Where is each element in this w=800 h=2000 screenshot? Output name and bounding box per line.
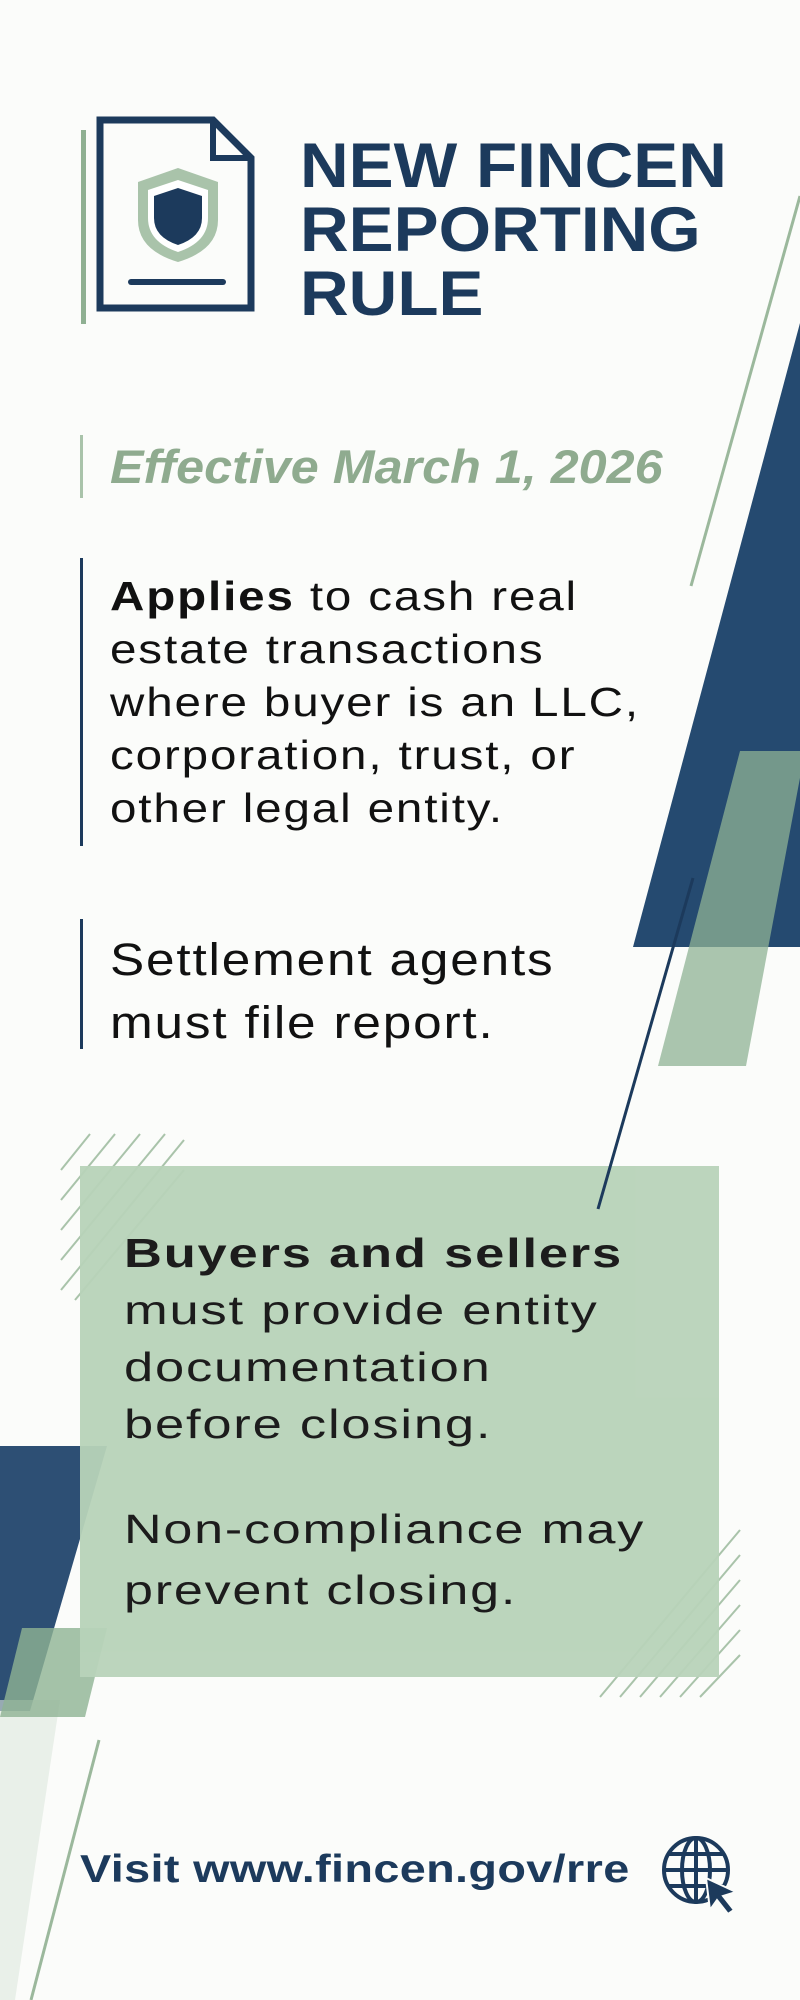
title xyxy=(300,131,727,329)
panel: requirements box xyxy=(80,1166,719,1677)
text block: applies: other legal entity. xyxy=(110,785,504,831)
text block: applies xyxy=(80,558,640,846)
text: buyers and sellers: documentation xyxy=(124,1344,492,1390)
text: buyers and sellers xyxy=(124,1230,623,1447)
effective date: Effective March 1, 2026 xyxy=(110,440,663,493)
text: buyers and sellers: Buyers and sellers xyxy=(124,1230,623,1276)
title: RULE xyxy=(300,259,484,329)
footer: website: Visit www.fincen.gov/rre xyxy=(80,1848,630,1891)
icon: globe with cursor xyxy=(662,1836,734,1913)
title: REPORTING xyxy=(300,195,701,265)
text block: settlement agents: must file report. xyxy=(110,997,495,1048)
text block: applies: Applies to cash real xyxy=(110,573,578,619)
text block: settlement agents xyxy=(80,919,555,1049)
icon: document with shield xyxy=(81,116,254,324)
text: non-compliance xyxy=(124,1506,645,1613)
text: buyers and sellers: before closing. xyxy=(124,1401,492,1447)
text: non-compliance: prevent closing. xyxy=(124,1567,517,1613)
text block: applies: where buyer is an LLC, xyxy=(110,679,640,725)
text block: applies: estate transactions xyxy=(110,626,544,672)
text: non-compliance: Non-compliance may xyxy=(124,1506,645,1552)
text: buyers and sellers: must provide entity xyxy=(124,1287,598,1333)
title: NEW FINCEN xyxy=(300,131,727,201)
text block: settlement agents: Settlement agents xyxy=(110,934,555,985)
text block: applies: corporation, trust, or xyxy=(110,732,576,778)
